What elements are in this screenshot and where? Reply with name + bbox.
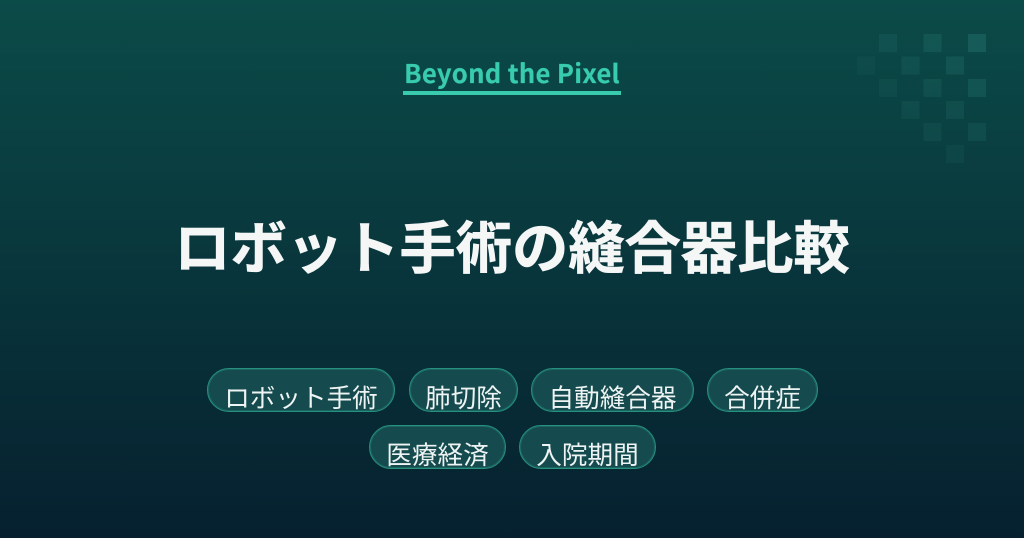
tag: 肺切除: 肺切除 bbox=[425, 378, 502, 415]
tag: ロボット手術 bbox=[207, 368, 395, 412]
tag: 合併症: 合併症 bbox=[724, 378, 801, 415]
title: ロボット手術の縫合器比較 bbox=[174, 204, 850, 285]
tag: 入院期間: 入院期間 bbox=[536, 435, 639, 472]
brand heading: Beyond the Pixel bbox=[404, 54, 620, 91]
tag: 入院期間 bbox=[519, 425, 656, 469]
tag: ロボット手術: ロボット手術 bbox=[224, 378, 378, 415]
tag: 医療経済: 医療経済 bbox=[386, 435, 489, 472]
tag: 肺切除 bbox=[409, 368, 518, 412]
tag: 自動縫合器 bbox=[531, 368, 694, 412]
tag: 自動縫合器: 自動縫合器 bbox=[548, 378, 676, 415]
decorative pixel grid icon bbox=[879, 34, 986, 141]
tag: 医療経済 bbox=[369, 425, 506, 469]
tag: 合併症 bbox=[707, 368, 818, 412]
